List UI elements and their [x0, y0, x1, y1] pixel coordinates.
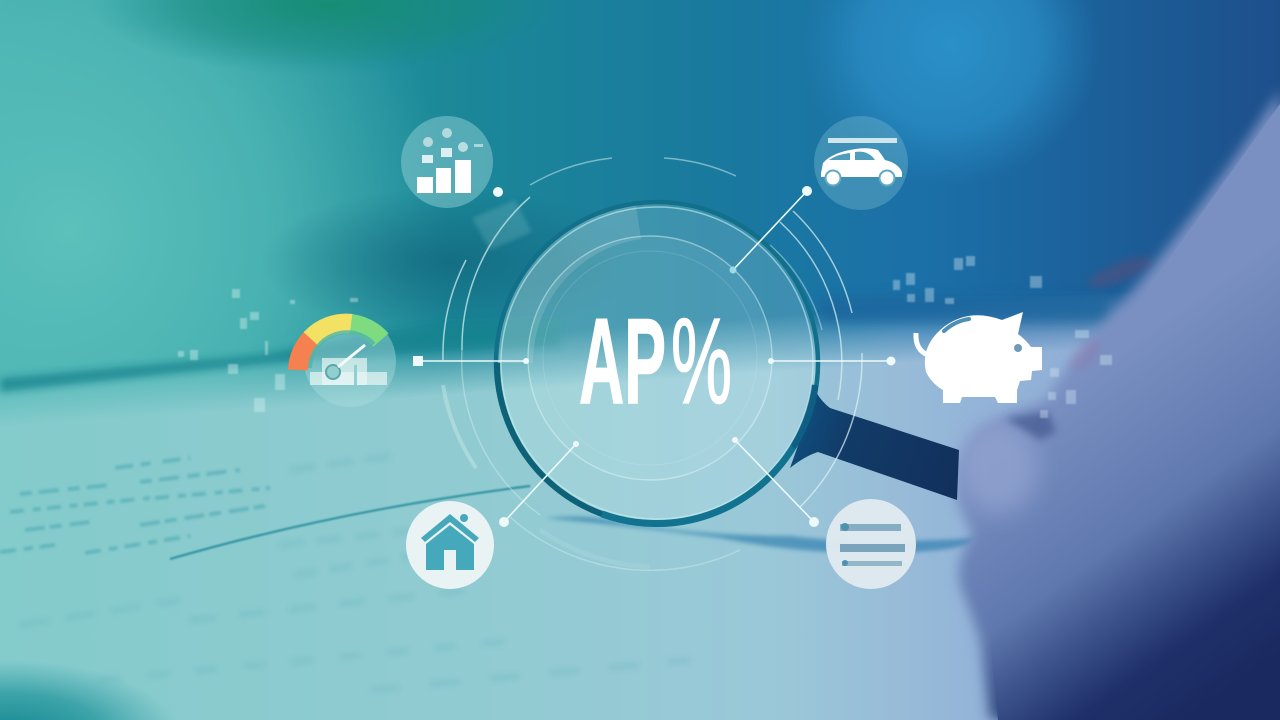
icon: house [406, 501, 494, 589]
connector: bottom right [732, 437, 819, 527]
connector: top right [730, 186, 812, 274]
data particles: left [178, 289, 358, 412]
lens shadow on page [545, 517, 975, 553]
magnifying glass lens [496, 202, 818, 524]
document text lines [0, 458, 270, 553]
translucent HUD patch [472, 200, 532, 250]
icon: car [814, 116, 908, 210]
icon: piggy bank [916, 312, 1042, 403]
magnifying glass handle [790, 392, 959, 500]
icon: bar chart [401, 116, 493, 208]
connector: top left dot [493, 187, 503, 197]
hand holding the magnifier [955, 90, 1280, 720]
connector: right [768, 356, 896, 366]
icon: credit report list [826, 499, 916, 589]
title: AP%: % [671, 293, 732, 429]
icon: credit score gauge [298, 315, 396, 407]
connector: left [413, 356, 529, 366]
data particles: right [893, 256, 1112, 418]
concentric HUD arcs [443, 158, 862, 570]
title: AP%: AP [579, 293, 666, 429]
connector: bottom left [499, 441, 579, 527]
document fold line [170, 486, 530, 559]
